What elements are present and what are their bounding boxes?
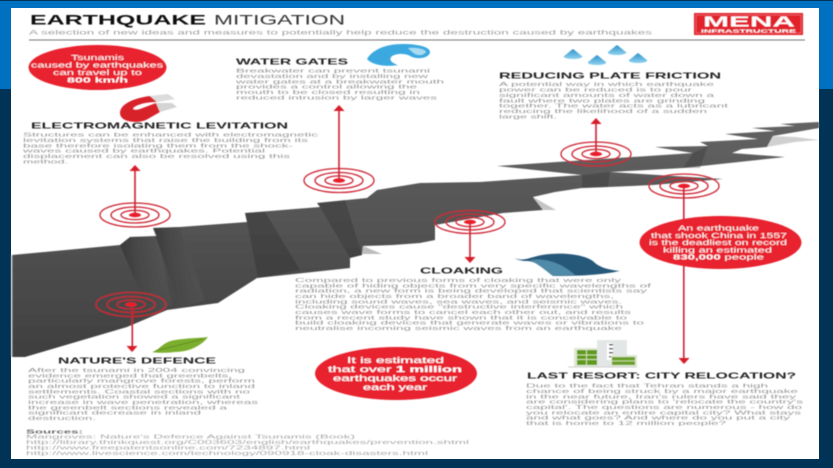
body text: electromagnetic levitation — [23, 133, 319, 165]
callout: one million earthquakes — [315, 347, 477, 400]
MENA Infrastructure logo: INFRASTRUCTURE — [701, 28, 796, 34]
icon: city buildings — [568, 340, 637, 368]
callout: tsunami speed: Tsunamis — [71, 55, 125, 62]
body text: last resort: that is home to 12 million people? — [526, 421, 726, 427]
icon: cloak — [514, 254, 620, 276]
body text: electromagnetic levitation: levitation systems that raise the building from its — [23, 138, 309, 144]
sources: http://www.freepatentsonline.com/7234897.html — [26, 446, 310, 452]
body text: cloaking: neutralise incoming seismic waves from an earthquake — [295, 326, 622, 332]
body text: last resort: capital'. The questions are numerous - how do — [526, 405, 802, 411]
callout: China 1557 earthquake: that shook China in 1557 — [651, 233, 787, 240]
body text: nature's defence: an almost protective function to inland — [28, 384, 255, 390]
callout: China 1557 earthquake: is the deadliest on record — [649, 240, 787, 247]
callout: China 1557 earthquake — [640, 216, 802, 269]
body text: last resort: and what goes? And where do you put a city — [526, 416, 791, 422]
body text: electromagnetic levitation: displacement can also be resolved using this — [23, 154, 291, 160]
sources: Sources: — [26, 430, 83, 436]
sources: Mangroves: Nature's Defence Against Tsunamis (Book) — [26, 434, 356, 440]
title — [30, 12, 345, 28]
body text: cloaking: Cloaking devices cause "destructive interference" which — [295, 305, 623, 311]
body text: nature's defence: evidence emerged that greenbelts, — [28, 373, 232, 379]
title: EARTHQUAKE — [30, 12, 206, 28]
body text: reducing plate friction: fault where two plates are grinding — [499, 98, 705, 104]
body text: water gates: reduced intrusion by larger waves — [236, 95, 438, 101]
body text: last resort: are considering plans to 'relocate the country's — [526, 400, 804, 406]
callout: China 1557 earthquake: An earthquake — [678, 226, 759, 232]
arrow and target: nature's defence — [96, 292, 166, 352]
sources — [26, 430, 469, 457]
body text: nature's defence: significant decrease in inland — [28, 411, 201, 417]
callout: China 1557 earthquake: 830,000 people — [673, 254, 764, 262]
body text: cloaking: radiation, a new form is being developed that scientists say — [295, 289, 648, 295]
arrow and target: cloaking — [435, 210, 505, 263]
panel: water gates — [236, 56, 444, 101]
body text: water gates: devastation and by installing new — [236, 74, 428, 80]
body text: last resort — [526, 384, 804, 427]
callout: tsunami speed: caused by earthquakes — [31, 62, 164, 70]
icon: magnet — [120, 94, 177, 122]
body text: reducing plate friction: reducing the likelihood of a sudden — [499, 109, 707, 115]
body text: water gates: water gates at a breakwater mouth — [236, 79, 444, 85]
arrow and target: city relocation — [649, 174, 719, 364]
body text: water gates: Breakwater can prevent tsunami — [236, 69, 430, 75]
body text: nature's defence: destruction. — [28, 416, 96, 422]
body text: cloaking: build cloaking devices that generate waves or vibrations to — [295, 321, 644, 327]
body text: nature's defence: After the tsunami in 2004 convincing — [28, 368, 245, 374]
body text: water gates: mouth to be closed resulting in — [236, 90, 420, 96]
body text: reducing plate friction: large shift. — [499, 114, 557, 120]
body text: nature's defence: such vegetation showed a significant — [28, 395, 241, 401]
body text: cloaking: causes wave forms to cancel each other out, and results — [295, 310, 632, 316]
callout: one million earthquakes: that over 1 million — [328, 365, 462, 374]
body text: reducing plate friction: significant amounts of water down a — [499, 93, 714, 99]
body text: cloaking: can hide objects from a broader band of wavelengths, — [295, 294, 614, 300]
panel: reducing plate friction — [499, 70, 729, 120]
callout: tsunami speed — [28, 45, 166, 90]
icon: water drops — [564, 45, 647, 65]
title: MITIGATION — [214, 12, 345, 28]
icon: water wave — [367, 44, 430, 66]
body text: water gates — [236, 69, 444, 101]
heading: electromagnetic levitation: ELECTROMAGNETIC LEVITATION — [31, 120, 288, 130]
heading: nature's defence: NATURE'S DEFENCE — [58, 356, 217, 366]
body text: reducing plate friction: power can be reduced is to pour — [499, 88, 693, 94]
MENA Infrastructure logo: MENA — [703, 14, 796, 30]
body text: cloaking: capable of hiding objects from very specific wavelengths of — [295, 283, 652, 289]
body text: last resort: chance of being struck by a major earthquake — [526, 389, 798, 395]
body text: electromagnetic levitation: method. — [23, 159, 68, 165]
subtitle: A selection of new ideas and measures to potentially help reduce the destruction caused by earthquakes — [29, 30, 652, 36]
heading: cloaking: CLOAKING — [420, 266, 503, 276]
body text: reducing plate friction — [499, 82, 729, 120]
callout: one million earthquakes: It is estimated — [347, 356, 445, 365]
body text: electromagnetic levitation: waves caused by earthquakes. Potential — [23, 149, 265, 155]
body text: last resort: you relocate an entire capital city? What stays — [526, 410, 802, 416]
body text: electromagnetic levitation: base therefore isolating them from the shock- — [23, 143, 294, 149]
body text: cloaking: from a recent study have shown that it is conceivable to — [295, 315, 627, 321]
body text: electromagnetic levitation: Structures can be enhanced with electromagnetic — [23, 133, 319, 139]
earthquake crack — [11, 122, 819, 357]
slide background: blue band — [0, 1, 833, 89]
body text: nature's defence: increase in wave penetration, whereas — [28, 400, 259, 406]
body text: cloaking — [295, 278, 652, 332]
panel: cloaking — [295, 266, 652, 332]
panel: last resort city relocation — [526, 370, 804, 427]
body text: nature's defence: particularly mangrove forests, perform — [28, 379, 256, 385]
sources: http://library.thinkquest.org/C003603/english/earthquakes/prevention.shtml — [26, 440, 469, 446]
arrow and target: reducing plate friction — [561, 118, 631, 166]
panel: electromagnetic levitation — [23, 120, 319, 165]
body text: last resort: in the near future, Iran's rulers have said they — [526, 394, 797, 400]
callout: one million earthquakes: earthquakes occur — [333, 374, 458, 383]
heading: water gates: WATER GATES — [236, 56, 349, 66]
icon: leaf — [152, 337, 208, 353]
panel: nature's defence — [28, 356, 259, 422]
body text: nature's defence — [28, 368, 259, 422]
body text: reducing plate friction: together. The water acts as a lubricant — [499, 104, 729, 110]
sources: http://www.livescience.com/technology/090918-cloak-disasters.html — [26, 451, 428, 457]
body text: nature's defence: settlements. Coastal sections with no — [28, 389, 250, 395]
body text: cloaking: including sound waves, sea waves, and seismic waves. — [295, 299, 622, 305]
arrow and target: electromagnetic levitation — [100, 165, 170, 227]
heading: last resort: LAST RESORT: CITY RELOCATION? — [527, 370, 796, 380]
body text: cloaking: Compared to previous forms of cloaking that were only — [295, 278, 622, 284]
callout: tsunami speed: can travel up to — [53, 70, 142, 77]
callout: one million earthquakes: each year — [363, 383, 427, 392]
heading: reducing plate friction: REDUCING PLATE FRICTION — [499, 70, 721, 80]
body text: reducing plate friction: A potential way in which earthquake — [499, 82, 714, 88]
body text: nature's defence: the greenbelt sections revealed a — [28, 405, 227, 411]
body text: last resort: Due to the fact that Tehran stands a high — [526, 384, 768, 390]
body text: water gates: provides a control allowing the — [236, 85, 417, 91]
callout: tsunami speed: 800 km/h — [67, 78, 128, 84]
MENA Infrastructure logo — [694, 13, 803, 35]
arrow and target: water gates — [304, 105, 374, 192]
callout: China 1557 earthquake: killing an estimated — [663, 248, 772, 254]
